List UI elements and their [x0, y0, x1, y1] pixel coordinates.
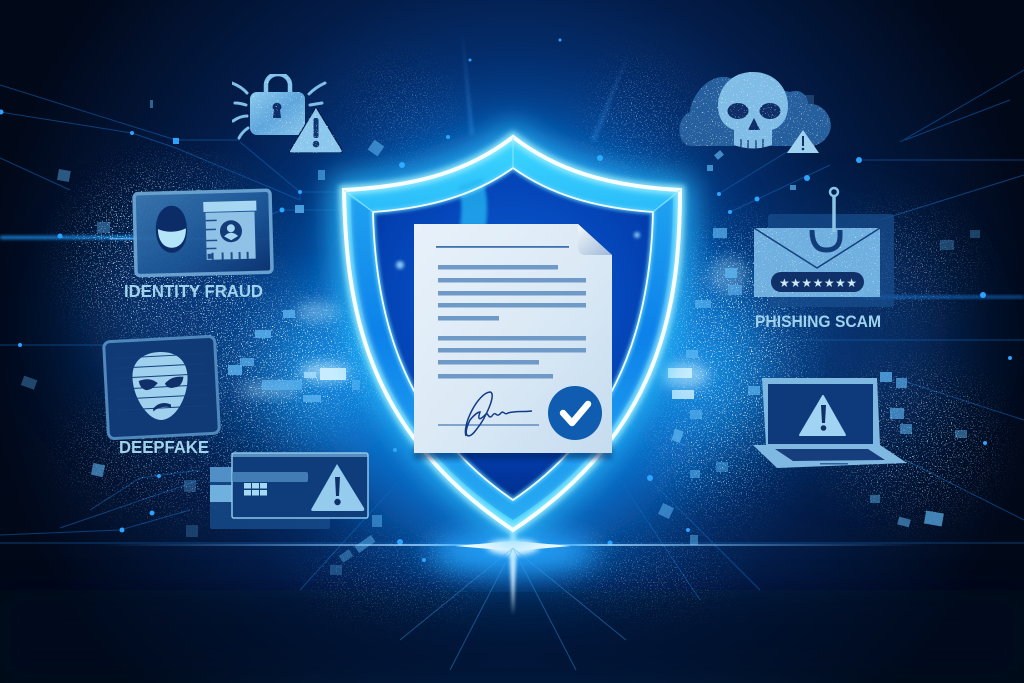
shield inner stroke [373, 168, 653, 500]
skull [718, 72, 788, 150]
fish hook [812, 188, 840, 250]
document shadow [414, 444, 612, 459]
document corner fold [578, 224, 612, 255]
mask face [131, 351, 190, 421]
bottom light flare [100, 515, 924, 670]
digital fragments [21, 95, 980, 575]
icon: credit card warning [210, 453, 368, 529]
cloud [679, 77, 831, 146]
document [414, 224, 612, 459]
icon: padlock with warning [232, 74, 342, 153]
label: identity fraud: IDENTITY FRAUD [124, 281, 263, 301]
label: deepfake: DEEPFAKE [119, 437, 209, 457]
small warning triangle [787, 130, 819, 153]
shield bevel lines [344, 137, 680, 212]
panel: phishing scam [754, 188, 894, 331]
password pill [771, 272, 864, 292]
panel: identity fraud [124, 190, 272, 301]
icon: laptop warning [753, 378, 907, 468]
silhouette [155, 205, 188, 253]
particle clouds [70, 70, 990, 605]
shield face [373, 168, 653, 500]
id document [203, 201, 258, 260]
check badge [548, 386, 602, 440]
shield band [344, 137, 680, 530]
padlock rays [232, 83, 325, 138]
light streaks [0, 30, 1024, 298]
light streak on shield [458, 178, 487, 226]
panel: phishing scam: ★★★★★★★ [779, 276, 857, 290]
label: phishing scam: PHISHING SCAM [755, 312, 881, 331]
glowing nodes [0, 38, 1012, 562]
circuit lines [0, 70, 1024, 600]
panel: deepfake [104, 336, 219, 457]
bright haze near shield [240, 257, 748, 397]
shield [344, 137, 680, 530]
envelope back [768, 214, 894, 307]
icon: skull cloud [679, 72, 831, 153]
signature [438, 392, 539, 436]
shield sparkles [396, 261, 404, 269]
envelope [754, 228, 880, 297]
shield inner darker band sides [351, 198, 513, 520]
document text lines [436, 246, 586, 378]
id card [134, 190, 272, 276]
deepfake card [104, 336, 219, 439]
document sheet [414, 224, 612, 453]
shield outer glow [344, 137, 680, 530]
shield outer stroke [344, 137, 680, 530]
